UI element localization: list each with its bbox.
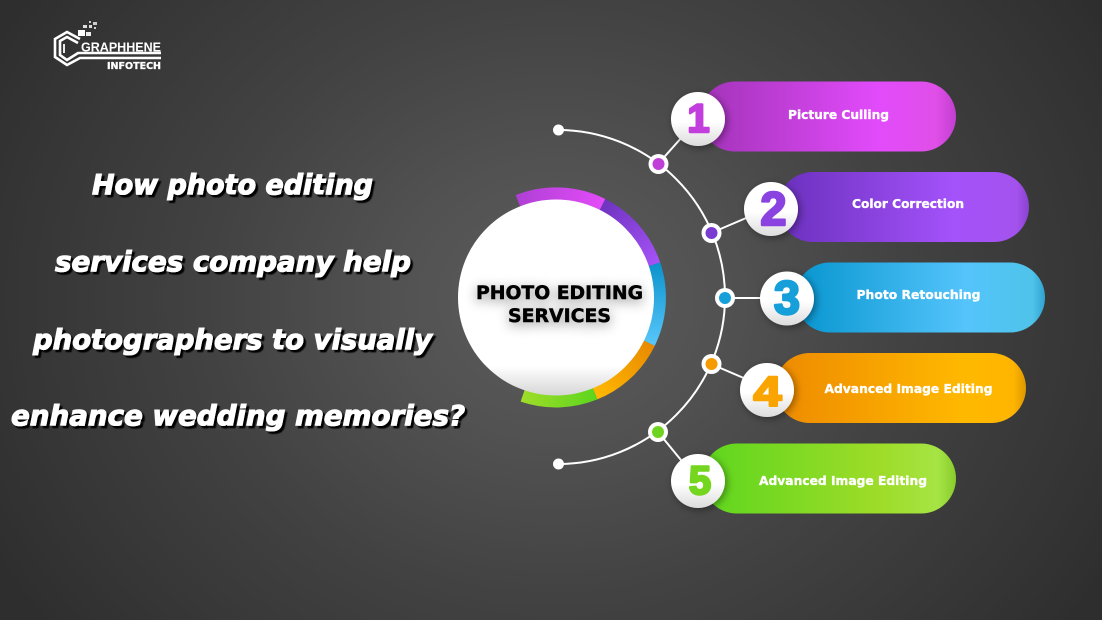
centre title (476, 282, 643, 327)
heading: main question: enhance wedding memories? (11, 399, 465, 432)
item 4: Advanced Image Editing: 4 (754, 368, 782, 415)
item 1: Picture Culling (648, 82, 956, 174)
item 2: Color Correction: Color Correction (852, 196, 964, 211)
item 5: Advanced Image Editing: Advanced Image Editing (759, 473, 927, 488)
item 1: Picture Culling: Picture Culling (788, 107, 889, 122)
item 2: Color Correction (702, 172, 1029, 243)
item 3: Photo Retouching: Photo Retouching (856, 287, 980, 302)
heading: main question: services company help (55, 245, 411, 278)
item 2: Color Correction: 2 (760, 182, 787, 235)
segmented ring around centre (518, 194, 659, 401)
heading: main question: photographers to visually (32, 323, 434, 356)
item 4: Advanced Image Editing: Advanced Image Editing (824, 381, 992, 396)
item 3: Photo Retouching (715, 262, 1045, 332)
item 3: Photo Retouching: 3 (774, 271, 800, 324)
logo: Graphene Infotech: GRAPHHENE (81, 40, 161, 54)
arc end dot bottom (553, 458, 564, 470)
main arc connector (558, 130, 725, 464)
item 5: Advanced Image Editing (648, 422, 956, 514)
item 4: Advanced Image Editing (702, 353, 1026, 423)
heading: main question: How photo editing (92, 168, 373, 201)
centre title: SERVICES (508, 305, 611, 327)
centre title: PHOTO EDITING (476, 282, 643, 304)
logo: Graphene Infotech: INFOTECH (107, 61, 161, 72)
logo: Graphene Infotech (55, 21, 161, 72)
centre disc with title (458, 200, 654, 396)
arc end dot top (553, 124, 564, 136)
heading: main question (11, 168, 465, 432)
item 5: Advanced Image Editing: 5 (689, 459, 711, 503)
item 1: Picture Culling: 1 (687, 97, 710, 141)
